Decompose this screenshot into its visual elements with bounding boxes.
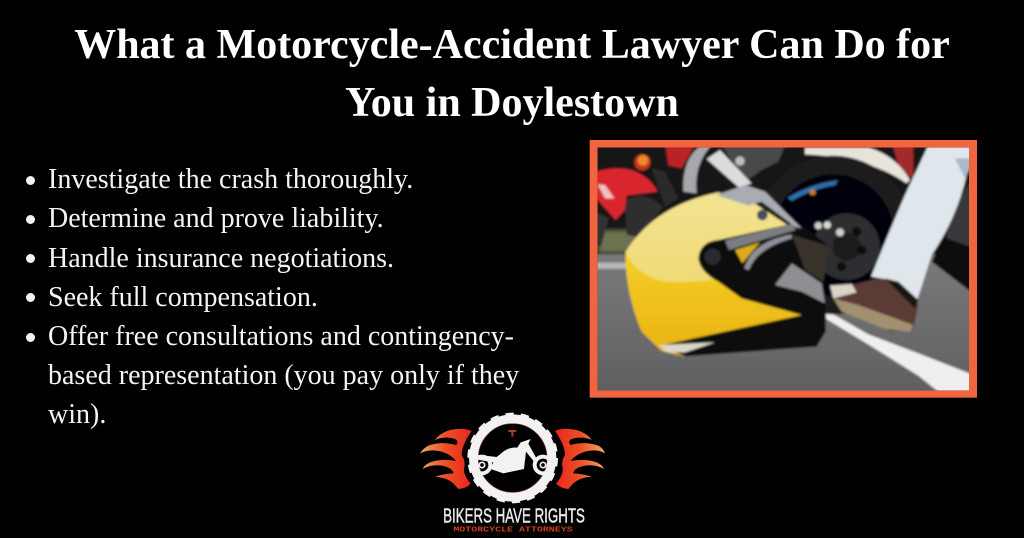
right side road and tyre bbox=[931, 239, 969, 292]
big wheel bbox=[766, 154, 900, 316]
road line bbox=[824, 312, 969, 390]
bullet list: Offer free consultations and contingency- bbox=[48, 321, 514, 352]
icon: motorcycle bbox=[474, 439, 551, 473]
frame bbox=[590, 140, 977, 398]
title bbox=[74, 22, 950, 126]
shoe bbox=[830, 278, 918, 332]
photo: helmet on road bbox=[590, 140, 977, 398]
logo tagline: MOTORCYCLE ATTORNEYS bbox=[453, 527, 573, 535]
bullet list: based representation (you pay only if they bbox=[48, 360, 519, 391]
icon: gear bbox=[471, 416, 555, 500]
title: What a Motorcycle-Accident Lawyer Can Do for bbox=[74, 22, 950, 68]
photo and logo artwork bbox=[420, 140, 977, 532]
background bbox=[598, 148, 969, 255]
bullet list bbox=[26, 164, 520, 430]
helmet bbox=[624, 190, 803, 318]
logo name: BIKERS HAVE RIGHTS bbox=[443, 504, 585, 527]
bullet list: Seek full compensation. bbox=[48, 282, 318, 313]
logo: Bikers Have Rights bbox=[420, 416, 605, 535]
motorcycle fork and chrome bbox=[683, 145, 712, 193]
icon: right flames bbox=[555, 429, 605, 489]
bullet list: win). bbox=[48, 399, 106, 430]
road bbox=[592, 254, 975, 398]
bullet list: Determine and prove liability. bbox=[48, 203, 384, 234]
icon: scales bbox=[508, 430, 516, 437]
rear fender bbox=[892, 142, 913, 180]
title: You in Doylestown bbox=[345, 80, 679, 126]
bullet list: Handle insurance negotiations. bbox=[48, 242, 394, 274]
bullet list: Investigate the crash thoroughly. bbox=[48, 164, 413, 195]
icon: left flames bbox=[420, 429, 472, 489]
red bike bbox=[664, 148, 696, 170]
leg bbox=[871, 142, 975, 302]
